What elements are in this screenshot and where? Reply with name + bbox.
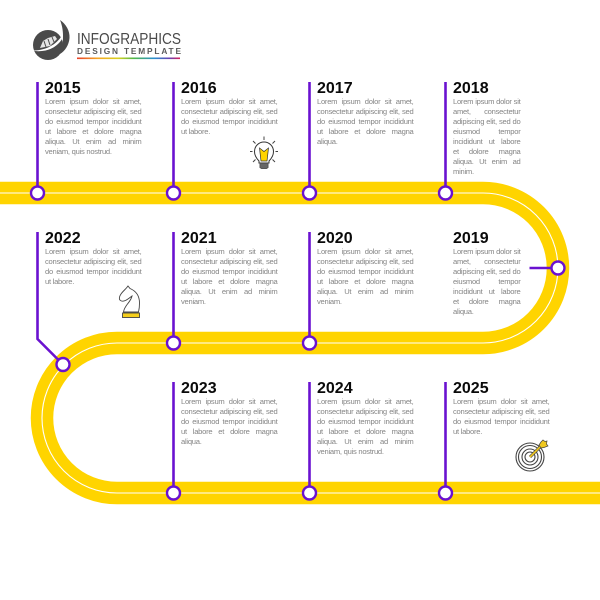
- body text: Lorem ipsum dolor sit amet,: [181, 397, 278, 406]
- body text: aliqua. Ut enim ad minim: [181, 287, 278, 296]
- connector and marker 2022: [38, 232, 70, 371]
- body text: aliqua.: [453, 307, 474, 316]
- body text: do eiusmod tempor incididunt: [181, 267, 278, 276]
- body text: [453, 247, 521, 316]
- connector and marker 2019: [530, 262, 564, 274]
- body text: veniam.: [181, 297, 206, 306]
- body text: [181, 247, 278, 306]
- body text: [45, 247, 142, 286]
- body text: do eiusmod tempor incididunt: [453, 417, 550, 426]
- body text: ut labore et dolore magna: [317, 427, 414, 436]
- body text: ut labore.: [181, 127, 210, 136]
- body text: consectetur adipiscing elit, sed: [181, 257, 278, 266]
- body text: Lorem ipsum dolor sit amet,: [317, 97, 414, 106]
- body text: Lorem ipsum dolor sit amet,: [317, 247, 414, 256]
- body text: adipiscing elit, sed do: [453, 117, 520, 126]
- body text: ut labore et dolore magna: [181, 427, 278, 436]
- body text: do eiusmod tempor incididunt: [45, 117, 142, 126]
- body text: incididunt ut labore: [453, 137, 520, 146]
- body text: Lorem ipsum dolor sit: [453, 97, 520, 106]
- connector and marker 2024: [303, 382, 316, 500]
- logo mark: [31, 20, 70, 60]
- body text: consectetur adipiscing elit, sed: [181, 107, 278, 116]
- body text: et dolore magna: [453, 297, 520, 306]
- card 2019: [453, 230, 521, 316]
- year: 2021: [181, 230, 217, 247]
- card 2024: [317, 380, 414, 456]
- icon: light bulb: [250, 136, 278, 168]
- body text: [317, 397, 414, 456]
- body text: consectetur adipiscing elit, sed: [45, 107, 142, 116]
- icon: chess knight: [119, 286, 140, 318]
- road centre line: [0, 193, 600, 493]
- card 2020: [317, 230, 414, 306]
- body text: ut labore et dolore magna: [317, 277, 414, 286]
- connector and marker 2023: [167, 382, 180, 500]
- body text: Lorem ipsum dolor sit amet,: [45, 97, 142, 106]
- body text: [45, 97, 142, 156]
- card 2017: [317, 80, 414, 146]
- year: 2020: [317, 230, 353, 247]
- body text: eiusmod tempor: [453, 127, 520, 136]
- body text: [317, 97, 414, 146]
- body text: minim.: [453, 167, 474, 176]
- body text: aliqua. Ut enim ad minim: [45, 137, 142, 146]
- body text: [453, 397, 550, 436]
- year: 2018: [453, 80, 489, 97]
- body text: Lorem ipsum dolor sit amet,: [181, 97, 278, 106]
- body text: eiusmod tempor: [453, 277, 520, 286]
- body text: adipiscing elit, sed do: [453, 267, 520, 276]
- body text: do eiusmod tempor incididunt: [317, 117, 414, 126]
- year: 2025: [453, 380, 489, 397]
- body text: Lorem ipsum dolor sit amet,: [45, 247, 142, 256]
- card 2018: [453, 80, 521, 176]
- card 2015: [45, 80, 142, 156]
- body text: [453, 97, 521, 176]
- road band: [0, 193, 600, 493]
- card 2025: [453, 380, 550, 436]
- rainbow rule: [77, 58, 180, 59]
- body text: ut labore.: [453, 427, 482, 436]
- connector and marker 2018: [439, 82, 452, 200]
- body text: Lorem ipsum dolor sit: [453, 247, 520, 256]
- body text: do eiusmod tempor incididunt: [45, 267, 142, 276]
- body text: consectetur adipiscing elit, sed: [317, 107, 414, 116]
- body text: ut labore et dolore magna: [317, 127, 414, 136]
- body text: do eiusmod tempor incididunt: [317, 417, 414, 426]
- body text: Lorem ipsum dolor sit amet,: [317, 397, 414, 406]
- body text: aliqua. Ut enim ad: [453, 157, 520, 166]
- body text: do eiusmod tempor incididunt: [317, 267, 414, 276]
- body text: veniam.: [317, 297, 342, 306]
- card 2021: [181, 230, 278, 306]
- body text: [317, 247, 414, 306]
- logo subtitle: DESIGN TEMPLATE: [77, 46, 181, 56]
- body text: amet, consectetur: [453, 107, 520, 116]
- connector and marker 2020: [303, 232, 316, 350]
- card 2023: [181, 380, 278, 446]
- body text: consectetur adipiscing elit, sed: [317, 407, 414, 416]
- body text: veniam, quis nostrud.: [317, 447, 384, 456]
- body text: consectetur adipiscing elit, sed: [317, 257, 414, 266]
- body text: amet, consectetur: [453, 257, 520, 266]
- connector and marker 2016: [167, 82, 180, 200]
- body text: Lorem ipsum dolor sit amet,: [181, 247, 278, 256]
- body text: consectetur adipiscing elit, sed: [181, 407, 278, 416]
- body text: do eiusmod tempor incididunt: [181, 117, 278, 126]
- body text: veniam, quis nostrud.: [45, 147, 112, 156]
- body text: Lorem ipsum dolor sit amet,: [453, 397, 550, 406]
- year: 2023: [181, 380, 217, 397]
- body text: aliqua.: [181, 437, 202, 446]
- body text: ut labore et dolore magna: [45, 127, 142, 136]
- year: 2017: [317, 80, 353, 97]
- body text: incididunt ut labore: [453, 287, 520, 296]
- year: 2015: [45, 80, 81, 97]
- body text: aliqua. Ut enim ad minim: [317, 437, 414, 446]
- body text: [181, 97, 278, 136]
- connector and marker 2015: [31, 82, 44, 200]
- year: 2019: [453, 230, 489, 247]
- year: 2022: [45, 230, 81, 247]
- connector and marker 2017: [303, 82, 316, 200]
- body text: aliqua. Ut enim ad minim: [317, 287, 414, 296]
- body text: et dolore magna: [453, 147, 520, 156]
- body text: consectetur adipiscing elit, sed: [453, 407, 550, 416]
- card 2022: [45, 230, 142, 286]
- year: 2016: [181, 80, 217, 97]
- body text: [181, 397, 278, 446]
- body text: do eiusmod tempor incididunt: [181, 417, 278, 426]
- body text: ut labore et dolore magna: [181, 277, 278, 286]
- logo header: [33, 20, 181, 60]
- logo title: INFOGRAPHICS: [77, 31, 181, 48]
- connector and marker 2025: [439, 382, 452, 500]
- connector and marker 2021: [167, 232, 180, 350]
- body text: ut labore.: [45, 277, 74, 286]
- card 2016: [181, 80, 278, 136]
- body text: aliqua.: [317, 137, 338, 146]
- body text: consectetur adipiscing elit, sed: [45, 257, 142, 266]
- year: 2024: [317, 380, 353, 397]
- icon: target with dart: [516, 440, 548, 471]
